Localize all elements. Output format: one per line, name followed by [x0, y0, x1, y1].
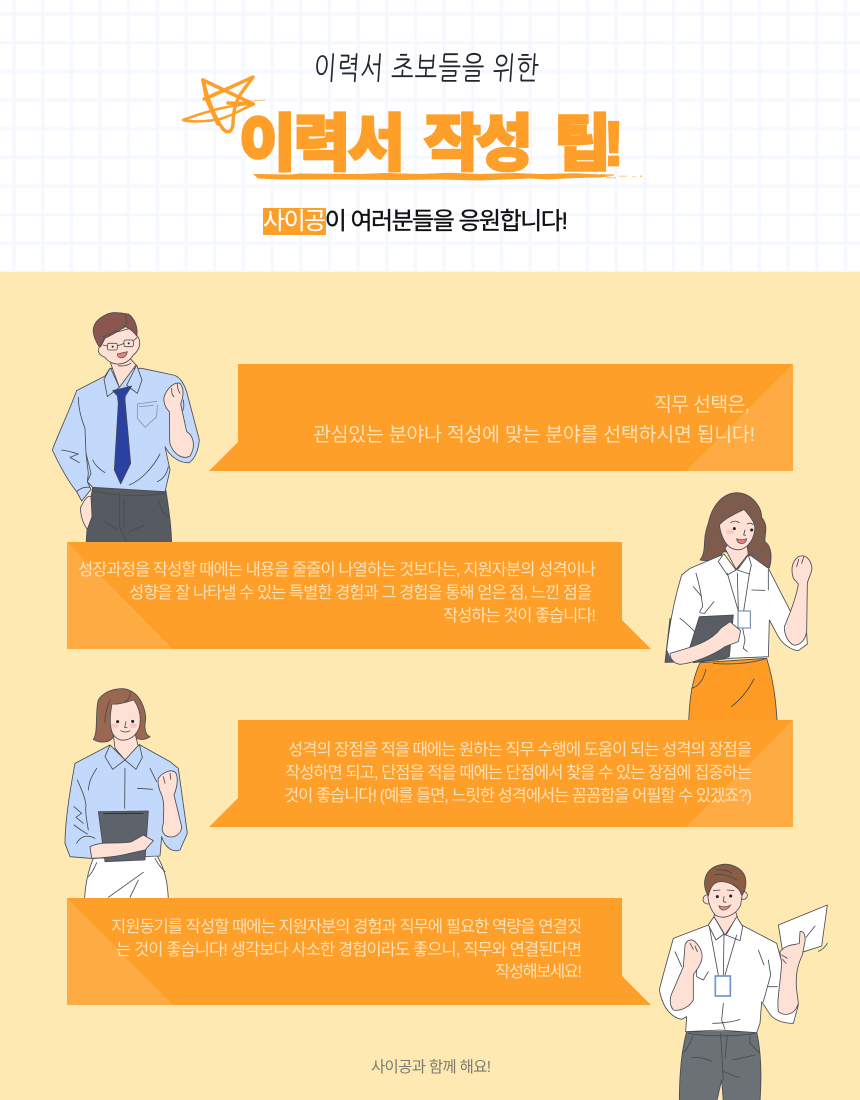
- banner 2: 성향을 잘 나타낼 수 있는 특별한 경험과 그 경험을 통해 얻은 점, 느낀 점을: [129, 583, 592, 602]
- main title: 이력서: [239, 110, 405, 179]
- illustration: woman with tablet: [65, 689, 187, 903]
- banner 3: [209, 720, 793, 827]
- banner 3: 것이 좋습니다! (예를 들면, 느릿한 성격에서는 꼼꼼함을 어필할 수 있겠죠?): [284, 786, 752, 805]
- illustration: man with glasses and tie: [52, 313, 199, 547]
- banner 4: [67, 898, 651, 1005]
- banner 3: 성격의 장점을 적을 때에는 원하는 직무 수행에 도움이 되는 성격의 장점을: [288, 740, 752, 759]
- illustration: woman with orange skirt: [665, 493, 812, 725]
- brush underline: [253, 173, 642, 180]
- subtitle: 사이공이 여러분들을 응원합니다!: [263, 208, 568, 235]
- icon: hand-drawn star: [183, 77, 265, 132]
- main title: [239, 110, 624, 179]
- banner 2: 작성하는 것이 좋습니다!: [443, 606, 596, 625]
- banner 2: [67, 542, 651, 649]
- main title: 팁!: [554, 110, 624, 179]
- banner 4: 는 것이 좋습니다! 생각보다 사소한 경험이라도 좋으니, 직무와 연결된다면: [116, 940, 582, 959]
- banner 1: 관심있는 분야나 적성에 맞는 분야를 선택하시면 됩니다!: [313, 424, 755, 446]
- banner 1: 직무 선택은,: [654, 394, 750, 416]
- banner 4: 작성해보세요!: [495, 962, 582, 981]
- header: [183, 52, 642, 235]
- subtitle highlight: [263, 208, 326, 235]
- banner 4: 지원동기를 작성할 때에는 지원자분의 경험과 직무에 필요한 역량을 연결짓: [111, 917, 582, 936]
- banner 1: [209, 364, 793, 471]
- illustration: man with lanyard and paper: [659, 864, 827, 1100]
- footer note: 사이공과 함께 해요!: [371, 1058, 491, 1076]
- small handwritten heading: 이력서 초보들을 위한: [313, 52, 540, 85]
- main title: 작성: [424, 110, 533, 179]
- banner 3: 작성하면 되고, 단점을 적을 때에는 단점에서 찾을 수 있는 장점에 집중하는: [285, 763, 752, 782]
- banner 2: 성장과정을 작성할 때에는 내용을 줄줄이 나열하는 것보다는, 지원자분의 성격이나: [78, 560, 596, 579]
